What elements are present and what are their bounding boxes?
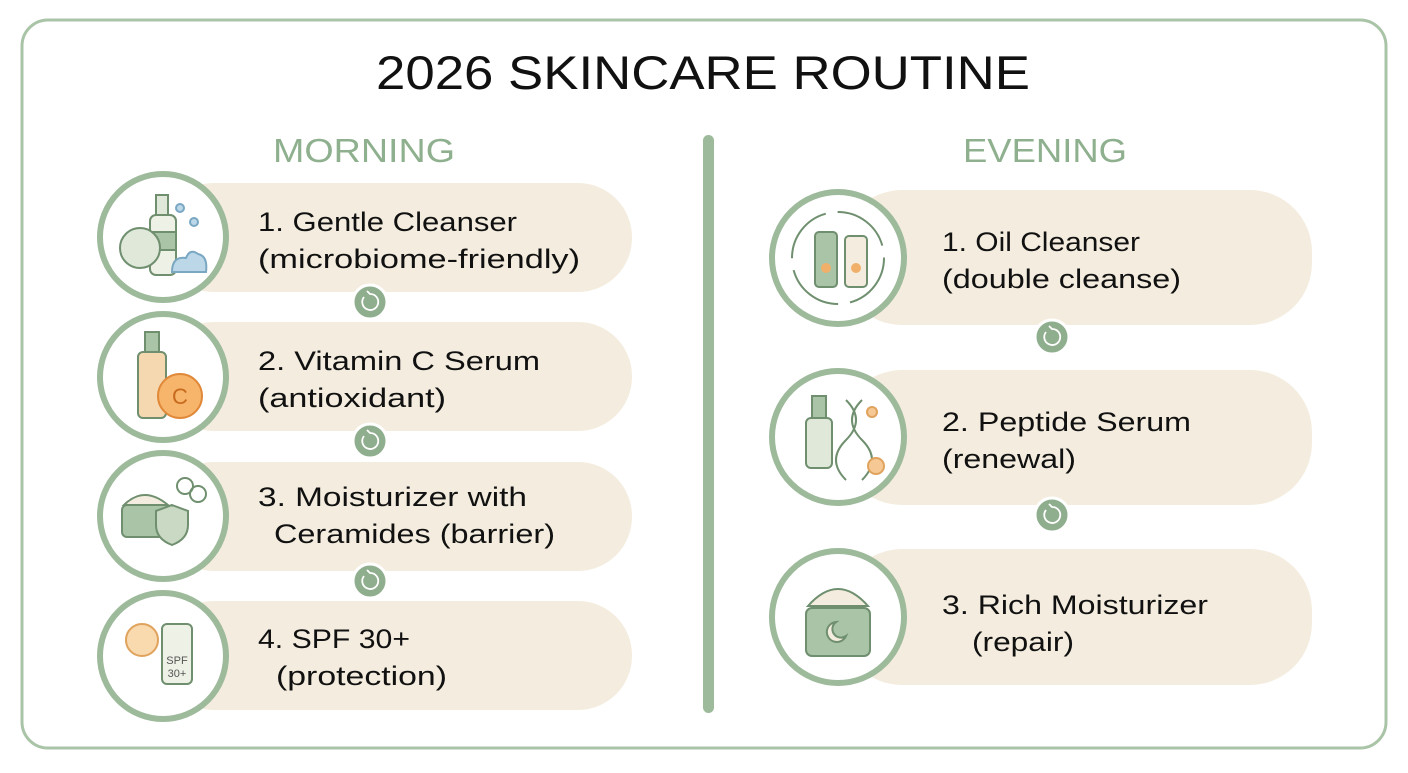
icon: peptide (806, 396, 884, 480)
connectors (353, 285, 1069, 598)
morning step 1 (100, 174, 632, 300)
heading: evening: EVENING (963, 132, 1127, 169)
evening step 1 (772, 190, 1312, 325)
morning step 3: Ceramides (barrier) (274, 519, 555, 549)
icon: cleanser (120, 195, 206, 275)
morning step 4 (100, 593, 632, 719)
morning step 2: 2. Vitamin C Serum (258, 346, 540, 376)
evening step 3: (repair) (972, 627, 1074, 657)
evening step 1: 1. Oil Cleanser (942, 227, 1140, 257)
icon: spf: 30+ (168, 668, 186, 680)
evening step 2: 2. Peptide Serum (942, 407, 1191, 437)
icon: oil cleanser (792, 212, 884, 304)
morning step 1: (microbiome-friendly) (258, 244, 580, 274)
icon: moisturizer (122, 478, 206, 545)
morning step 2 (100, 314, 632, 440)
heading: morning: MORNING (273, 132, 455, 169)
icon: spf: SPF (166, 655, 188, 667)
evening step 3 (772, 549, 1312, 685)
icon: vitamin c (138, 332, 202, 418)
morning step 3 (100, 453, 632, 579)
divider (703, 135, 714, 713)
icon: vitamin c: C (172, 384, 188, 409)
evening step 1: (double cleanse) (942, 264, 1181, 294)
title: 2026 SKINCARE ROUTINE (376, 46, 1030, 99)
icon: spf (126, 624, 192, 684)
evening step 3: 3. Rich Moisturizer (942, 590, 1208, 620)
morning step 4: (protection) (276, 661, 447, 691)
morning step 2: (antioxidant) (258, 383, 446, 413)
evening step 2 (772, 370, 1312, 505)
morning step 4: 4. SPF 30+ (258, 624, 410, 654)
evening step 2: (renewal) (942, 444, 1076, 474)
morning step 1: 1. Gentle Cleanser (258, 207, 517, 237)
morning step 3: 3. Moisturizer with (258, 482, 527, 512)
icon: rich moisturizer (806, 589, 870, 656)
